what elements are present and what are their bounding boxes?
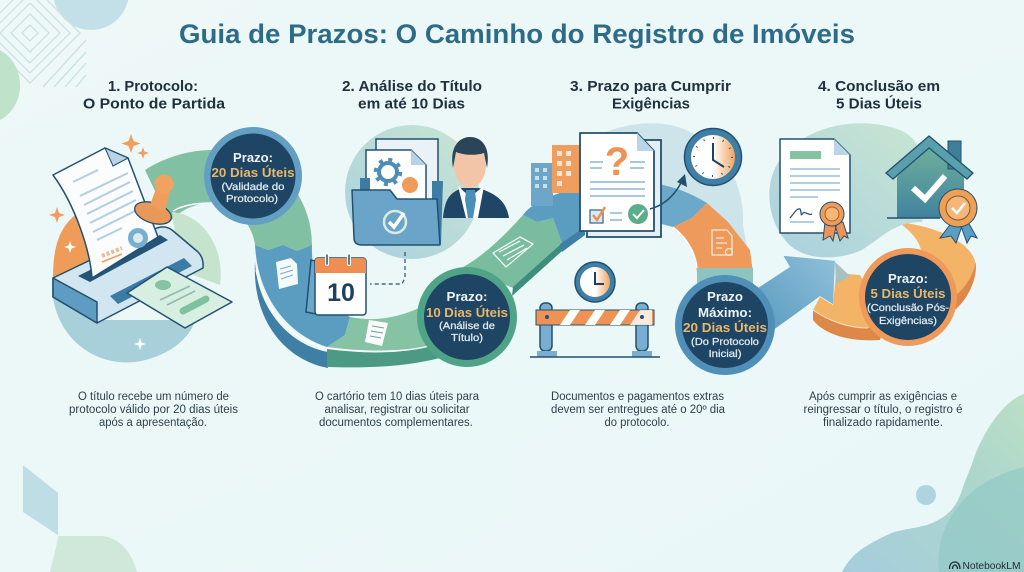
body text: do protocolo. <box>604 417 670 429</box>
badge: step 2: 10 Dias Úteis <box>426 305 508 320</box>
badge: step 3: Inicial) <box>708 348 742 360</box>
body text: O cartório tem 10 dias úteis para <box>315 391 480 403</box>
barrier and clock <box>530 262 660 357</box>
step 4 illustration: certificate and house <box>769 123 977 257</box>
body text: finalizado rapidamente. <box>823 417 943 429</box>
badge: step 2: (Análise de <box>439 320 495 332</box>
badge: step 4 <box>859 248 957 346</box>
badge: step 4: (Conclusão Pós- <box>867 302 950 314</box>
badge: step 2: Título) <box>451 332 483 344</box>
output card <box>127 267 232 328</box>
body text: O título recebe um número de <box>78 391 229 403</box>
watermark: NotebookLM: NotebookLM <box>962 560 1020 572</box>
body text: Documentos e pagamentos extras <box>551 391 724 403</box>
step 3 illustration: document with question <box>531 128 742 237</box>
badge: step 2 <box>417 267 517 367</box>
badge: step 1: Protocolo) <box>226 193 278 205</box>
analyst <box>443 137 509 218</box>
stamp <box>132 174 174 228</box>
body text: analisar, registrar ou solicitar <box>324 404 470 416</box>
paper <box>53 148 158 278</box>
step headings: 2. Análise do Título <box>342 78 482 95</box>
step headings: 3. Prazo para Cumprir <box>570 78 731 95</box>
icon: papers on ribbon <box>365 320 388 346</box>
folder <box>352 139 443 245</box>
badge: step 3: 20 Dias Úteis <box>683 320 767 335</box>
body text: reingressar o título, o registro é <box>804 404 962 416</box>
sparkles <box>49 134 149 223</box>
badge: step 4: Exigências) <box>879 315 937 327</box>
step headings: O Ponto de Partida <box>83 96 226 112</box>
arrow to step 4 <box>745 255 835 352</box>
body text: devem ser entregues até o 20º dia <box>551 404 726 416</box>
badge: step 1: Prazo: <box>233 150 273 165</box>
step headings: Exigências <box>612 96 690 112</box>
step 1 illustration: stamp and printer <box>49 134 232 362</box>
document <box>587 140 661 237</box>
icon: calendar 10 <box>306 255 366 315</box>
body text: Após cumprir as exigências e <box>809 391 957 403</box>
step headings: 4. Conclusão em <box>818 78 940 95</box>
badge: step 1: 20 Dias Úteis <box>212 165 294 180</box>
step headings: 1. Protocolo: <box>108 78 198 95</box>
body text: protocolo válido por 20 dias úteis <box>69 404 238 416</box>
step 2 illustration: folder and analyst <box>345 125 509 284</box>
badge: step 3: Máximo: <box>698 305 752 320</box>
icon: calendar 10: 10 <box>327 279 355 307</box>
badge: step 1 <box>204 127 302 225</box>
step headings: 5 Dias Úteis <box>836 94 922 112</box>
body text <box>69 391 962 429</box>
pale blob behind step 3 <box>600 123 752 275</box>
badge: step 3: Prazo <box>707 289 743 304</box>
step headings <box>83 78 940 112</box>
badge: step 4: Prazo: <box>888 271 928 286</box>
step headings: em até 10 Dias <box>358 96 465 112</box>
badge: step 4: 5 Dias Úteis <box>870 286 946 301</box>
badge: step 1: (Validade do <box>222 181 285 193</box>
body text: após a apresentação. <box>99 417 207 429</box>
buildings <box>531 163 553 206</box>
house <box>886 136 977 243</box>
icon: document on orange band <box>712 230 732 256</box>
badge: step 2: Prazo: <box>446 289 488 304</box>
arrow to clock <box>650 181 682 209</box>
printer <box>53 227 203 323</box>
icon: stacked papers on green band <box>493 237 533 267</box>
orange curved band <box>813 222 976 340</box>
icon: small document on ribbon <box>276 258 298 289</box>
clock <box>684 128 742 186</box>
body text: documentos complementares. <box>319 417 473 429</box>
step 3 illustration: document with question: ? <box>605 140 629 184</box>
certificate <box>780 139 850 241</box>
badge: step 3: (Do Protocolo <box>691 336 759 348</box>
timeline ribbon <box>145 150 753 368</box>
badge: step 3 <box>675 275 775 375</box>
title: Guia de Prazos: O Caminho do Registro de Imóveis <box>179 19 855 49</box>
